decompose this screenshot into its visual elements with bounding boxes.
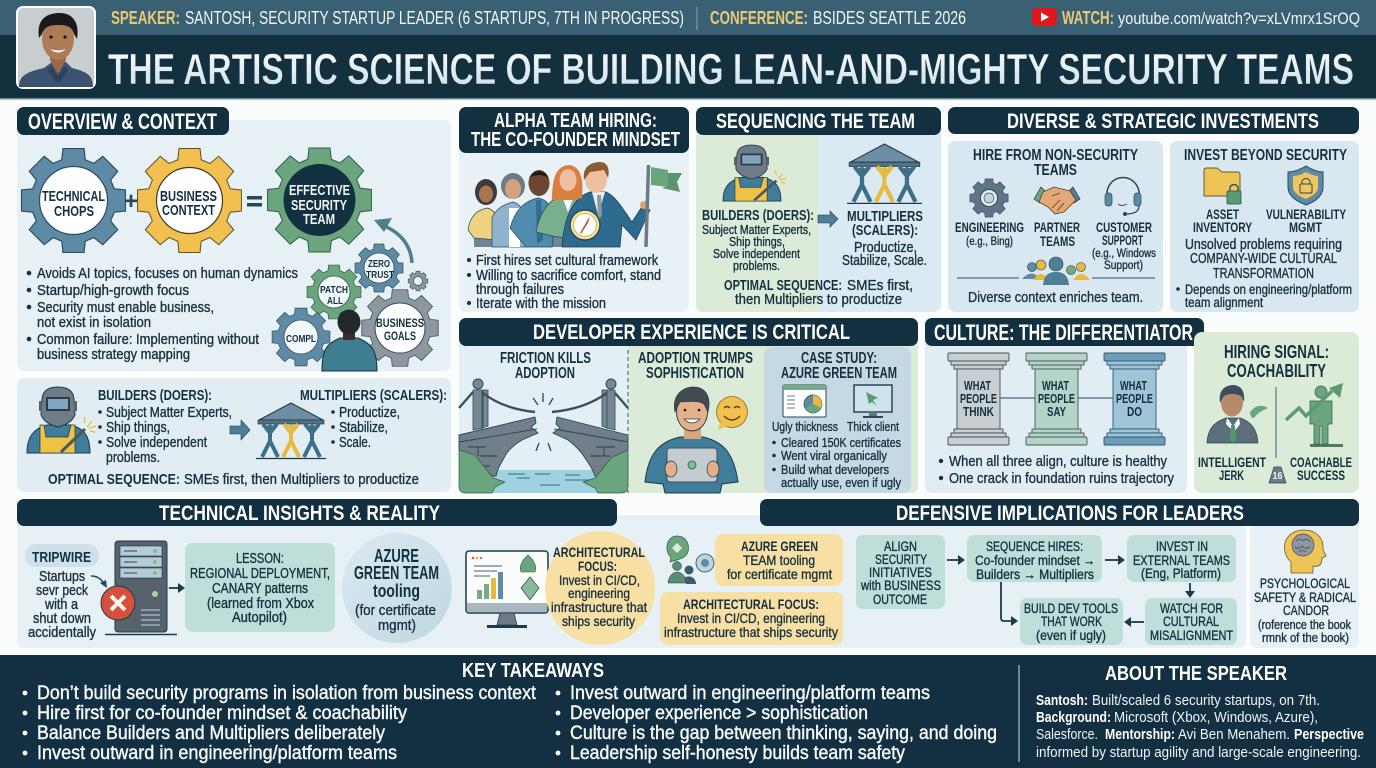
heading: hiring signal	[1224, 342, 1329, 381]
psychological safety text	[1254, 576, 1356, 645]
icon: smiley speech bubble	[716, 396, 748, 430]
alpha bullets: Iterate with the mission	[476, 296, 606, 312]
multipliers column text: Productize,	[854, 240, 917, 256]
optimal sequence note: then Multipliers to productize	[735, 291, 902, 308]
heading: hiring signal: COACHABILITY	[1227, 361, 1326, 381]
panel: builders and multipliers summary	[17, 378, 451, 492]
adoption heading	[638, 350, 753, 382]
flow box: invest in external teams	[1127, 535, 1236, 582]
panel: overview and context	[17, 107, 451, 371]
gear: business goals: GOALS	[384, 331, 416, 343]
heading: sequencing	[696, 107, 941, 135]
builders column text: Subject Matter Experts,	[702, 222, 811, 237]
flow box: watch for cultural misalignment: MISALIGNMENT	[1150, 628, 1233, 643]
pillar: what people do	[1104, 353, 1165, 445]
builders text: Subject Matter Experts,	[106, 405, 232, 421]
overview bullets: Security must enable business,	[37, 299, 214, 316]
yellow architectural focus ellipse: engineering	[568, 585, 630, 601]
icon: intelligent jerk	[1207, 385, 1268, 443]
pillar: what people say: PEOPLE	[1038, 392, 1075, 406]
header meta: conference: BSIDES SEATTLE 2026	[813, 8, 966, 28]
alpha bullets: through failures	[476, 282, 564, 298]
gear: business goals	[362, 290, 438, 366]
key takeaways heading: KEY TAKEAWAYS	[462, 660, 604, 682]
icon: brain in head	[1284, 530, 1326, 573]
panel: culture	[925, 318, 1204, 493]
psychological safety text: CANDOR	[1283, 603, 1329, 618]
icon: curved arrow	[374, 218, 412, 263]
azure green team circle: GREEN TEAM	[354, 563, 439, 583]
heading: developer experience	[459, 318, 918, 346]
pillar: what people say	[1026, 353, 1087, 445]
optimal sequence note: SMEs first,	[847, 277, 913, 294]
flow box: align security initiatives: OUTCOME	[873, 592, 927, 607]
case labels and bullets: Went viral organically	[781, 448, 887, 463]
builders text: Ship things,	[106, 420, 170, 436]
illustration: broken bridge	[459, 379, 628, 493]
icon: person viewing gears	[322, 310, 377, 371]
panel: sequencing the team	[696, 107, 941, 312]
icon: headset	[1105, 178, 1141, 216]
flow box: build dev tools	[1020, 598, 1123, 645]
psychological safety text: PSYCHOLOGICAL	[1260, 576, 1350, 591]
culture bullets	[939, 453, 1174, 487]
gear: effective security team: TEAM	[303, 211, 335, 228]
alpha bullets: First hires set cultural framework	[476, 253, 659, 269]
alpha bullets	[467, 253, 661, 312]
icon: ugly dashboard window	[783, 385, 826, 417]
psychological safety text: (roference the book	[1258, 618, 1352, 632]
gear: business goals: BUSINESS	[376, 318, 424, 330]
sub-heading	[973, 147, 1139, 179]
flow box: watch for cultural misalignment: WATCH FOR	[1160, 601, 1223, 616]
takeaways column two: Invest outward in engineering/platform teams	[570, 683, 930, 704]
adoption heading: ADOPTION TRUMPS	[638, 350, 753, 367]
gear: effective security team: SECURITY	[291, 197, 347, 214]
azure green team circle: AZURE	[374, 546, 419, 566]
psychological safety text: rmnk of the book)	[1262, 631, 1349, 645]
labels: focus areas: MGMT	[1289, 220, 1323, 235]
gear: technical chops	[22, 149, 125, 252]
sub-heading: TEAMS	[1034, 162, 1077, 179]
pillar: what people do: PEOPLE	[1116, 392, 1153, 406]
equals sign	[247, 196, 262, 206]
lesson box: CANARY patterns	[212, 581, 308, 597]
yellow architectural focus ellipse: ARCHITECTURAL	[553, 544, 645, 560]
optimal sequence note: OPTIMAL SEQUENCE:	[48, 471, 180, 488]
labels: focus areas: INVENTORY	[1193, 220, 1252, 235]
case labels and bullets: Ugly thickness	[772, 419, 838, 434]
arrow: sequence to build	[1001, 582, 1018, 626]
flow box: sequence hires	[967, 535, 1102, 582]
callout: azure green team tooling: AZURE GREEN	[741, 538, 818, 554]
gear: patch all	[307, 265, 361, 319]
gear: effective security team: EFFECTIVE	[289, 182, 350, 199]
flow box: align security initiatives	[856, 535, 945, 609]
gear: technical chops: CHOPS	[54, 203, 94, 220]
tripwire text: accidentally	[28, 625, 97, 641]
takeaways column one: Hire first for co-founder mindset & coachability	[37, 703, 407, 724]
multipliers text: Stabilize,	[339, 420, 388, 436]
gear: effective security team	[268, 148, 371, 252]
takeaways column one: Balance Builders and Multipliers deliberately	[37, 723, 385, 744]
gear: compliance	[272, 308, 330, 366]
case study heading: CASE STUDY:	[801, 350, 877, 367]
yellow architectural focus ellipse	[545, 531, 655, 645]
labels: teams: ENGINEERING	[955, 220, 1024, 235]
yellow architectural focus ellipse: ships security	[562, 613, 635, 629]
tripwire text: Startups	[39, 569, 85, 585]
takeaways column two	[556, 683, 997, 764]
invest text: TRANSFORMATION	[1213, 266, 1314, 282]
pillar: what people think: THINK	[963, 405, 994, 419]
builders column text: problems.	[733, 258, 780, 273]
icon: weight	[1269, 467, 1286, 483]
optimal sequence note	[48, 471, 419, 488]
heading: technical insights: TECHNICAL INSIGHTS & REALITY	[159, 502, 440, 525]
overview bullets: business strategy mapping	[37, 346, 190, 363]
footer divider	[1018, 665, 1020, 762]
speaker photo	[17, 7, 95, 88]
tripwire text: shut down	[33, 611, 91, 627]
flow box: sequence hires: Co-founder mindset →	[975, 553, 1095, 568]
friction heading: FRICTION KILLS	[500, 350, 591, 367]
heading: defensive implications: DEFENSIVE IMPLICATIONS FOR LEADERS	[896, 502, 1244, 525]
invest text	[1176, 237, 1352, 310]
flow box: watch for cultural misalignment: CULTURAL	[1163, 614, 1219, 629]
gear: zero trust: ZERO	[368, 258, 390, 270]
callout: architectural focus: Invest in CI/CD, engineering	[677, 610, 825, 626]
lesson box: (learned from Xbox	[207, 596, 315, 612]
heading: defensive implications	[760, 499, 1359, 526]
case labels and bullets: Thick client	[847, 419, 899, 434]
icon: weight: 16	[1272, 471, 1283, 482]
adoption heading: SOPHISTICATION	[646, 365, 744, 382]
gear: zero trust	[355, 244, 403, 292]
heading: hiring signal: HIRING SIGNAL:	[1224, 342, 1329, 362]
callout: architectural focus: infrastructure that ships security	[664, 624, 838, 640]
pillar: what people think	[948, 353, 1009, 445]
case study heading: AZURE GREEN TEAM	[781, 365, 897, 382]
panel: case study	[764, 347, 911, 493]
arrow: tripwire to server	[91, 576, 107, 588]
illustration: developer with tablet	[645, 387, 738, 493]
takeaways column one	[23, 683, 537, 764]
heading: developer experience: DEVELOPER EXPERIENCE IS CRITICAL	[533, 321, 850, 344]
builders column text: BUILDERS (DOERS):	[702, 208, 814, 224]
header meta: speaker: SPEAKER:	[111, 8, 180, 28]
gear: business context	[138, 149, 241, 252]
labels: focus areas: VULNERABILITY	[1266, 207, 1346, 222]
plus sign: +	[124, 188, 138, 215]
callout: architectural focus	[660, 592, 843, 645]
pillar: what people say: WHAT	[1042, 379, 1069, 393]
gear: zero trust: TRUST	[366, 269, 394, 281]
panel: invest beyond security	[1170, 141, 1359, 312]
icon: pipeline monitor	[466, 551, 548, 628]
labels: teams: SUPPORT	[1102, 233, 1143, 248]
takeaways column one: Don’t build security programs in isolation from business context	[37, 683, 537, 704]
multipliers column text: Stabilize, Scale.	[842, 253, 927, 269]
footer band	[0, 655, 1376, 768]
builders text: problems.	[106, 450, 160, 466]
invest text: Unsolved problems requiring	[1185, 237, 1342, 253]
culture bullets: One crack in foundation ruins trajectory	[949, 470, 1174, 487]
labels: teams	[955, 220, 1156, 272]
labels: teams: PARTNER	[1034, 220, 1080, 235]
case labels and bullets: Build what developers	[781, 462, 889, 477]
labels: teams: (e.g., Bing)	[966, 236, 1013, 248]
tripwire text: sevr peck	[36, 583, 89, 599]
icon: handshake	[1034, 187, 1080, 214]
dashed divider	[627, 350, 629, 493]
arrow: builders to multipliers	[230, 420, 250, 440]
labels: signals	[1198, 455, 1352, 483]
builders column text: Ship things,	[729, 234, 785, 249]
builders column text: Solve independent	[713, 246, 800, 261]
caption: diverse context: Diverse context enriches team.	[968, 289, 1143, 306]
arrow: sequence to invest	[1105, 555, 1125, 565]
callout: azure green team tooling: for certificate mgmt	[727, 566, 832, 582]
gear: patch all: PATCH	[320, 284, 348, 296]
yellow architectural focus ellipse: infrastructure that	[551, 599, 647, 615]
builders text	[98, 388, 232, 466]
optimal sequence note: SMEs first, then Multipliers to productize	[184, 471, 419, 488]
heading: overview: OVERVIEW & CONTEXT	[28, 109, 217, 134]
case study heading	[781, 350, 897, 382]
callout: architectural focus: ARCHITECTURAL FOCUS:	[683, 596, 819, 612]
takeaways column two: Culture is the gap between thinking, saying, and doing	[570, 723, 997, 744]
about the speaker text: Avi Ben Menahem.	[1178, 727, 1290, 743]
icon: multipliers temple	[847, 144, 922, 203]
about the speaker text: Salesforce.	[1036, 727, 1098, 743]
icon: youtube	[1032, 8, 1057, 26]
yellow architectural focus ellipse: Invest in CI/CD,	[559, 572, 640, 588]
optimal sequence note	[724, 277, 913, 308]
about the speaker heading: ABOUT THE SPEAKER	[1105, 663, 1287, 685]
icon: welder	[723, 145, 786, 201]
panel: technical insights and defensive implications band	[17, 515, 1359, 648]
multipliers column text	[842, 209, 927, 269]
gear: business context: BUSINESS	[160, 188, 217, 205]
labels: teams: (e.g., Windows	[1092, 248, 1156, 260]
builders text: Solve independent	[106, 435, 207, 451]
flow box: align security initiatives: ALIGN	[884, 539, 917, 554]
overview bullets: not exist in isolation	[37, 314, 151, 331]
azure green team circle	[342, 533, 452, 643]
about the speaker text: Background:	[1036, 710, 1111, 726]
header meta: watch link: WATCH:	[1062, 8, 1114, 28]
tripwire text: with a	[44, 597, 79, 613]
panel: hire from non-security teams	[948, 141, 1163, 312]
tripwire label: TRIPWIRE	[32, 549, 91, 566]
labels: signals: INTELLIGENT	[1198, 455, 1267, 470]
flow box: build dev tools: (even if ugly)	[1036, 628, 1106, 643]
multipliers text: Productize,	[339, 405, 400, 421]
labels: signals: COACHABLE	[1290, 455, 1352, 470]
header meta: conference: CONFERENCE:	[710, 8, 808, 28]
about the speaker text: Santosh:	[1036, 693, 1088, 709]
optimal sequence note: OPTIMAL SEQUENCE:	[724, 277, 842, 294]
flow box: sequence hires: Builders → Multipliers	[976, 567, 1094, 582]
arrow: invest to watch	[1185, 583, 1195, 598]
header divider	[696, 7, 698, 30]
labels: teams: CUSTOMER	[1096, 220, 1152, 235]
multipliers text	[300, 388, 447, 451]
multipliers column text: (SCALERS):	[852, 223, 918, 239]
icon: welder	[27, 387, 96, 453]
heading: culture: CULTURE: THE DIFFERENTIATOR	[934, 320, 1193, 345]
gear: patch all: ALL	[327, 295, 343, 307]
azure green team circle: (for certificate	[355, 602, 436, 619]
pillar: what people think: PEOPLE	[960, 392, 997, 406]
labels: signals: JERK	[1219, 468, 1244, 483]
header meta: speaker: SANTOSH, SECURITY STARTUP LEADER (6 STARTUPS, 7TH IN PROGRESS)	[185, 8, 684, 28]
builders text: BUILDERS (DOERS):	[98, 388, 212, 404]
case labels and bullets: actually use, even if ugly	[781, 475, 901, 490]
case labels and bullets	[772, 419, 901, 490]
pillar: what people do: DO	[1127, 405, 1142, 419]
labels: teams: Support)	[1104, 260, 1143, 272]
heading: technical insights	[17, 499, 617, 526]
arrow: align to sequence	[947, 555, 965, 565]
arrow: builders to multipliers	[818, 211, 838, 227]
about the speaker text: Perspective	[1294, 727, 1364, 743]
connector lines	[1000, 397, 1113, 399]
gear: small idle gear	[408, 271, 428, 291]
icon: coachable success	[1286, 383, 1343, 447]
tripwire text	[28, 569, 97, 641]
labels: focus areas: ASSET	[1206, 207, 1240, 222]
heading: culture	[925, 318, 1204, 346]
flow box: sequence hires: SEQUENCE HIRES:	[986, 539, 1083, 554]
pillar: what people think: WHAT	[964, 379, 991, 393]
heading: sequencing: SEQUENCING THE TEAM	[716, 110, 915, 133]
about the speaker text: Built/scaled 6 security startups, on 7th.	[1092, 693, 1320, 709]
lesson box	[185, 543, 335, 632]
gear: technical chops: TECHNICAL	[42, 188, 105, 205]
header meta: conference	[710, 8, 966, 28]
multipliers column text: MULTIPLIERS	[847, 209, 923, 225]
heading: alpha team: THE CO-FOUNDER MINDSET	[471, 129, 680, 151]
icon: engineering gear	[970, 179, 1008, 217]
flow box: align security initiatives: with BUSINESS	[860, 578, 941, 593]
case labels and bullets: Cleared 150K certificates	[781, 435, 901, 450]
takeaways column two: Leadership self-honesty builds team safety	[570, 743, 905, 764]
heading: overview	[17, 107, 229, 135]
invest text: team alignment	[1185, 295, 1263, 310]
panel: alpha team hiring	[459, 107, 689, 312]
flow box: invest in external teams: EXTERNAL TEAMS	[1133, 553, 1230, 568]
labels: signals: SUCCESS	[1297, 468, 1345, 483]
overview bullets: Startup/high-growth focus	[37, 282, 189, 299]
lesson box: REGIONAL DEPLOYMENT,	[190, 566, 330, 582]
icon: people chatting	[667, 536, 714, 584]
labels: focus areas	[1193, 207, 1346, 235]
sub-heading: HIRE FROM NON-SECURITY	[973, 147, 1139, 164]
pillar: what people do: WHAT	[1120, 379, 1147, 393]
icon: multipliers temple	[256, 403, 326, 458]
azure green team circle: tooling	[373, 581, 420, 601]
icon: failed server	[101, 541, 177, 634]
takeaways column two: Developer experience > sophistication	[570, 703, 868, 724]
callout: azure green team tooling	[715, 534, 843, 586]
flow box: build dev tools: BUILD DEV TOOLS	[1024, 601, 1118, 616]
yellow architectural focus ellipse: FOCUS:	[578, 558, 617, 574]
heading: alpha team: ALPHA TEAM HIRING:	[494, 110, 657, 132]
icon: thick client monitor	[854, 385, 892, 418]
alpha bullets: Willing to sacrifice comfort, stand	[476, 268, 661, 284]
icon: locked folder	[1204, 168, 1241, 204]
panel: developer experience	[459, 318, 918, 493]
lesson box: LESSON:	[236, 551, 284, 567]
takeaways column one: Invest outward in engineering/platform teams	[37, 743, 397, 764]
gear: business context: CONTEXT	[162, 202, 215, 219]
flow box: watch for cultural misalignment	[1145, 598, 1237, 645]
icon: diverse group	[957, 257, 1155, 285]
flow box: invest in external teams: (Eng, Platform)	[1141, 566, 1221, 581]
multipliers text: MULTIPLIERS (SCALERS):	[300, 388, 447, 404]
overview bullets: Common failure: Implementing without	[37, 331, 260, 348]
tripwire label	[25, 544, 99, 567]
heading: alpha team	[459, 107, 689, 153]
callout: azure green team tooling: TEAM tooling	[743, 552, 815, 568]
about the speaker text	[1036, 693, 1364, 761]
lesson box: Autopilot)	[232, 610, 287, 626]
azure green team circle: mgmt)	[378, 617, 416, 634]
panel: hiring signal coachability	[1194, 332, 1359, 493]
arrow: watch to build	[1124, 617, 1144, 627]
culture bullets: When all three align, culture is healthy	[949, 453, 1167, 470]
overview bullets: Avoids AI topics, focuses on human dynamics	[37, 265, 298, 282]
friction heading: ADOPTION	[515, 365, 575, 382]
multipliers text: Scale.	[339, 435, 371, 451]
arrow: server to lesson	[169, 583, 185, 593]
overview bullets	[27, 265, 298, 363]
flow box: align security initiatives: SECURITY	[875, 552, 927, 567]
flow box: invest in external teams: INVEST IN	[1156, 539, 1208, 554]
labels: teams: TEAMS	[1040, 234, 1075, 249]
flow box: build dev tools: THAT WORK	[1041, 614, 1102, 629]
pillar: what people say: SAY	[1047, 405, 1067, 419]
builders column text	[702, 208, 814, 273]
gear: compliance: COMPL	[286, 333, 316, 345]
illustration: founding team with flag	[468, 162, 682, 247]
header band	[0, 0, 1376, 100]
header meta: speaker	[111, 8, 684, 28]
flow box: align security initiatives: INITIATIVES	[869, 565, 932, 580]
divider	[1276, 387, 1277, 458]
about the speaker text: Mentorship:	[1105, 727, 1175, 743]
about the speaker text: Microsoft (Xbox, Windows, Azure),	[1114, 710, 1318, 726]
icon: vulnerability shield	[1288, 166, 1323, 205]
friction heading	[500, 350, 591, 382]
